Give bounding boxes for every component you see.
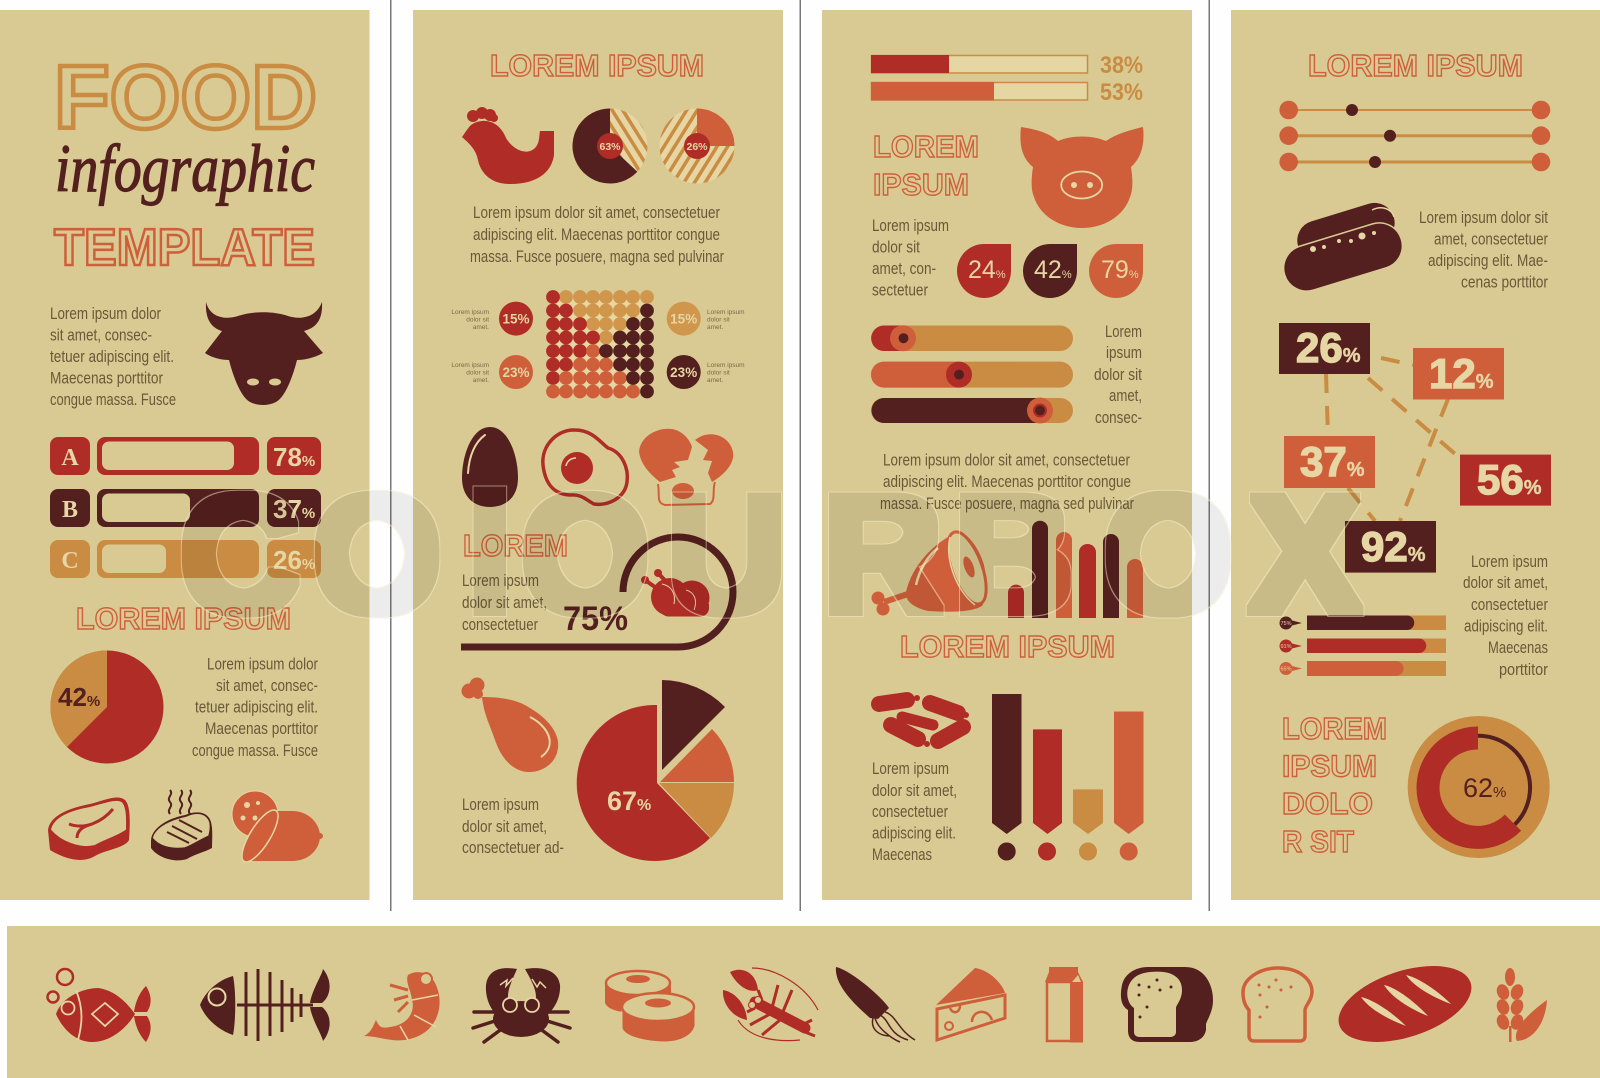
pie chart: 42% [50,650,164,764]
icon: egg [462,427,518,507]
pie chart: 26% [660,108,734,184]
heading: four lines: DOLO [1282,786,1373,821]
donut chart: 62% [1408,716,1550,858]
icon: squid [836,967,915,1042]
heading: LOREM IPSUM [900,629,1115,664]
text block: poultry: Lorem ipsum dolor sit amet, consectetuer [473,203,720,222]
pie chart: 67%: 67% [607,786,651,816]
icon: fried egg [543,430,627,504]
icon: cheese [936,968,1005,1040]
network node: 37%: 37% [1300,438,1365,485]
network node: 12%: 12% [1429,350,1494,397]
text block: centre [880,451,1134,513]
drop: 42% [1023,244,1077,298]
heading: LOREM IPSUM [490,48,704,83]
panel: hot dog and network [1231,10,1600,900]
text block: beef intro: sit amet, consec- [50,326,152,344]
text block: Lorem ipsum [872,759,949,778]
heading: four lines: LOREM [1282,711,1387,746]
icon: roast chicken [641,569,710,616]
text block: dolor sit [872,238,920,256]
text block: consectetuer [872,802,948,821]
panel: pork and sausage [822,10,1192,900]
legend: 23% dark: 23% [670,365,697,380]
network node: 92%: 92% [1361,523,1426,570]
legend: 23% dark: amet. [707,377,723,384]
legend: 23% orange: amet. [473,377,489,384]
text block: Lorem ipsum [462,571,539,590]
watermark: COlOURBOX [180,462,1360,646]
legend: 23% dark [667,355,745,389]
text block: consectetuer ad- [462,838,564,857]
bar chart: rounded columns [1008,521,1143,618]
icon: chicken [462,107,554,184]
bar: C 26%: 26% [273,545,315,575]
text block: centre: massa. Fusce posuere, magna sed pulvinar [880,494,1134,513]
text block: poultry [470,203,724,266]
icon: pig head [1020,127,1144,228]
slider bar 3 [871,398,1073,424]
legend: 15% ochre: dolor sit [707,316,730,324]
icon: drumstick [462,678,558,772]
heading: LOREM IPSUM two lines: LOREM [873,129,979,164]
text block: pie description [192,655,318,760]
icon: wheat [1495,968,1547,1042]
panel: icon strip [7,926,1600,1078]
bar chart: arrow columns [992,694,1144,860]
heading: LOREM IPSUM two lines [873,129,979,202]
progress bar: 53% [871,79,1143,106]
legend: 23% dark: Lorem ipsum [707,362,745,369]
range sliders [1279,101,1550,171]
text block: right aligned: dolor sit amet, [1463,573,1548,592]
text block: beef intro: Lorem ipsum dolor [50,304,161,323]
network node: 56%: 56% [1477,456,1542,503]
icon: crab [473,968,570,1042]
icon: lobster [723,968,818,1041]
network node: 37% [1284,436,1375,488]
text block: dolor sit amet, [462,817,547,836]
heading: LOREM: LOREM [463,528,568,563]
bar: A 78%: A [61,445,79,471]
text block: right aligned: ipsum [1106,343,1142,362]
bar: B 37% [50,489,321,527]
panel: poultry and eggs [413,10,783,900]
text block: right aligned: Lorem [1105,322,1142,341]
text block: adipiscing elit. [872,824,956,842]
text block: right aligned: Lorem ipsum [1471,552,1548,571]
legend: 15% red [451,302,533,336]
icon: steak [48,797,130,860]
text block: pie description: Maecenas porttitor [205,719,318,738]
progress bar: 53%: 53% [1100,79,1143,106]
legend: 23% orange: dolor sit [466,370,489,377]
text block: poultry: massa. Fusce posuere, magna sed pulvinar [470,247,724,266]
text block: pie description: congue massa. Fusce [192,741,318,760]
icon: toast outline [1243,968,1312,1041]
bar: C 26%: C [61,548,79,574]
text block: right aligned: amet, consectetuer [1434,230,1548,248]
text block: right aligned: consec- [1095,408,1142,427]
text block: right aligned: dolor sit [1094,365,1142,384]
icon: fish bone [200,969,330,1041]
text block: dolor sit amet, [462,593,547,612]
drop: 24%: 24% [968,256,1006,284]
text block [872,759,957,864]
drop: 42%: 42% [1034,256,1072,284]
network: dashed connections [1326,358,1462,521]
text block: right aligned: adipiscing elit. [1464,617,1548,636]
text block: centre: adipiscing elit. Maecenas porttitor congue [883,472,1131,491]
text block: dolor sit amet, [872,781,957,800]
icon: sausages [879,696,968,746]
icon: bread loaf [1329,951,1481,1057]
text block: right aligned: porttitor [1499,660,1548,679]
text block: pie description: sit amet, consec- [216,676,318,695]
icon: fish [48,969,151,1042]
text block: beef intro [50,304,176,409]
network node: 56% [1460,455,1551,506]
icon: salami [232,791,323,867]
legend: 15% ochre [667,302,745,336]
text block: pie description: tetuer adipiscing elit. [195,698,318,717]
pie chart: 42%: 42% [58,682,100,712]
drop: 79%: 79% [1101,256,1139,284]
drop: 79% [1089,244,1143,298]
bar: A 78%: 78% [273,442,315,472]
legend: 15% red: 15% [502,312,530,326]
panel: food title and beef [0,10,370,900]
pie chart: 67% [577,680,734,861]
bar: A 78% [50,437,321,475]
text block: right aligned [1419,208,1548,292]
title: infographic: infographic [55,130,315,206]
text block [872,216,949,300]
bar: B 37%: B [62,497,78,523]
drop: 24% [957,244,1011,298]
heading: four lines: R SIT [1282,824,1354,859]
legend: 15% red: dolor sit [466,316,489,324]
pie chart: 63%: 63% [599,141,621,153]
network node: 92% [1345,521,1436,573]
legend: 23% dark: dolor sit [707,370,730,377]
legend: 15% ochre: amet. [707,324,723,331]
text block: right aligned [1094,322,1142,427]
network node: 12% [1413,348,1504,400]
text block: right aligned: Lorem ipsum dolor sit [1419,208,1548,227]
progress curve: 75%: 75% [563,600,628,638]
text block: beef intro: Maecenas porttitor [50,368,163,388]
legend: 23% orange: 23% [502,365,530,380]
title: FOOD: FOOD [54,48,317,148]
text block: amet, con- [872,259,936,278]
text block [462,795,564,857]
text block: right aligned: cenas porttitor [1461,273,1548,292]
text block: pie description: Lorem ipsum dolor [207,655,318,674]
heading: four lines: IPSUM [1282,748,1377,784]
icon: dark bread [1121,967,1213,1042]
text block: consectetuer [462,615,538,634]
icon: sushi rolls [605,971,695,1042]
legend: 23% orange: Lorem ipsum [451,362,489,369]
network node: 26% [1279,323,1370,374]
legend: 15% ochre: 15% [670,312,697,326]
heading: LOREM IPSUM two lines: IPSUM [873,167,969,202]
icon: milk carton [1045,967,1083,1042]
bar: C 26% [50,540,321,578]
title: TEMPLATE: TEMPLATE [54,219,315,277]
pie chart: 26%: 26% [686,141,708,153]
text block: centre: Lorem ipsum dolor sit amet, consectetuer [883,451,1130,470]
horizontal bar chart with markers: 65% [1280,666,1292,672]
text block [462,571,547,634]
heading: LOREM IPSUM [76,601,291,636]
text block: right aligned: adipiscing elit. Mae- [1428,251,1548,270]
icon: grilled steak [151,790,212,860]
text block: right aligned: Maecenas [1488,638,1548,657]
progress bar: 38%: 38% [1100,52,1143,79]
icon: ham [872,527,994,616]
text block: poultry: adipiscing elit. Maecenas porttitor congue [473,225,720,244]
network node: 26%: 26% [1296,324,1361,371]
icon: broken egg [639,429,733,505]
legend: 15% red: Lorem ipsum [451,309,489,316]
text block: right aligned: amet, [1109,386,1142,405]
text block: right aligned: consectetuer [1471,595,1548,614]
horizontal bar chart with markers: 75% [1280,621,1292,627]
progress bar: 38% [871,52,1143,79]
icon: cow head [205,302,323,405]
text block: beef intro: congue massa. Fusce [50,390,176,409]
text block: right aligned [1463,552,1548,679]
bar: B 37%: 37% [273,494,315,524]
heading: LOREM IPSUM [1308,48,1523,83]
legend: 23% orange [451,355,533,389]
progress curve: 75% [461,537,733,647]
text block: beef intro: tetuer adipiscing elit. [50,347,174,366]
icon: shrimp [364,972,440,1040]
heading: four lines [1282,711,1387,859]
text block: Lorem ipsum [872,216,949,235]
pie chart: 63% [572,108,648,184]
horizontal bar chart with markers [1280,616,1446,676]
legend: 15% ochre: Lorem ipsum [707,309,745,316]
slider bar 2 [871,362,1073,388]
slider bar 1 [871,325,1073,351]
donut chart: 62%: 62% [1463,773,1506,803]
dot matrix chart [546,290,654,398]
horizontal bar chart with markers: 91% [1280,644,1292,650]
icon: hot dog [1278,198,1408,297]
text block: Maecenas [872,845,932,864]
text block: sectetuer [872,280,928,300]
text block: Lorem ipsum [462,795,539,814]
legend: 15% red: amet. [473,324,489,331]
